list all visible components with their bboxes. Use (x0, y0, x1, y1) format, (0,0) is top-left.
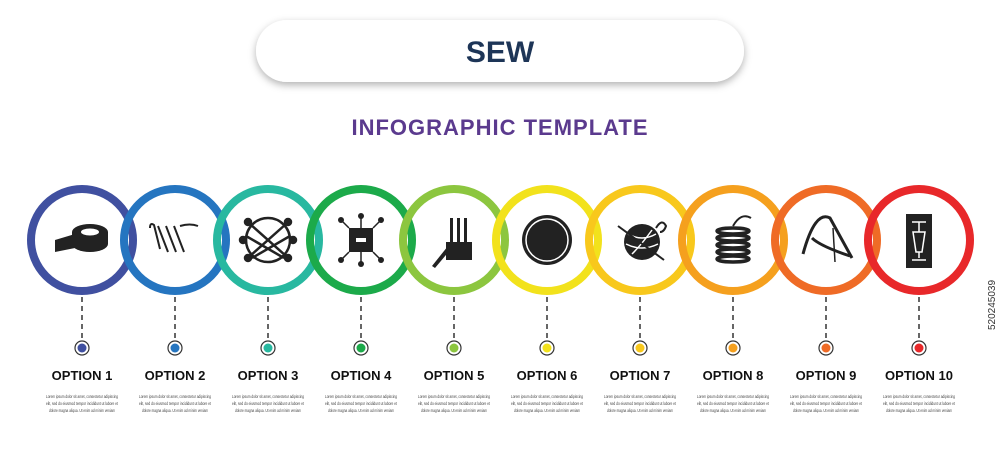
description texts: elit, sed do eiusmod tempor incididunt ut labore et (604, 401, 677, 406)
description texts: Lorem ipsum dolor sit amet, consectetur adipiscing (232, 394, 305, 399)
description texts: dolore magna aliqua. Ut enim ad minim veniam (421, 408, 487, 413)
icon: pin cushion (240, 218, 296, 262)
description texts: elit, sed do eiusmod tempor incididunt ut labore et (790, 401, 863, 406)
description texts: Lorem ipsum dolor sit amet, consectetur adipiscing (511, 394, 584, 399)
option labels: OPTION 2 (145, 368, 205, 383)
title pill: SEW (466, 36, 535, 69)
description texts: elit, sed do eiusmod tempor incididunt ut labore et (697, 401, 770, 406)
option labels: OPTION 1 (52, 368, 112, 383)
option labels: OPTION 9 (796, 368, 856, 383)
description texts: Lorem ipsum dolor sit amet, consectetur adipiscing (46, 394, 119, 399)
description texts: dolore magna aliqua. Ut enim ad minim veniam (49, 408, 115, 413)
subtitle: INFOGRAPHIC TEMPLATE (351, 115, 649, 140)
description texts: elit, sed do eiusmod tempor incididunt ut labore et (325, 401, 398, 406)
description texts (46, 394, 956, 413)
description texts: Lorem ipsum dolor sit amet, consectetur adipiscing (790, 394, 863, 399)
description texts: elit, sed do eiusmod tempor incididunt ut labore et (418, 401, 491, 406)
dots (75, 341, 926, 355)
icon: button circle (522, 215, 572, 265)
description texts: Lorem ipsum dolor sit amet, consectetur adipiscing (883, 394, 956, 399)
description texts: elit, sed do eiusmod tempor incididunt ut labore et (511, 401, 584, 406)
description texts: dolore magna aliqua. Ut enim ad minim veniam (142, 408, 208, 413)
description texts: Lorem ipsum dolor sit amet, consectetur adipiscing (697, 394, 770, 399)
option labels: OPTION 8 (703, 368, 763, 383)
option labels (52, 368, 953, 383)
icon: threader (803, 217, 852, 262)
description texts: Lorem ipsum dolor sit amet, consectetur adipiscing (604, 394, 677, 399)
description texts: elit, sed do eiusmod tempor incididunt ut labore et (46, 401, 119, 406)
icon: spring thread (717, 216, 751, 262)
description texts: elit, sed do eiusmod tempor incididunt ut labore et (139, 401, 212, 406)
description texts: Lorem ipsum dolor sit amet, consectetur adipiscing (325, 394, 398, 399)
option labels: OPTION 6 (517, 368, 577, 383)
connectors (82, 297, 919, 338)
icon: needle case (432, 218, 472, 268)
description texts: Lorem ipsum dolor sit amet, consectetur adipiscing (418, 394, 491, 399)
title pill (256, 20, 744, 82)
description texts: elit, sed do eiusmod tempor incididunt ut labore et (232, 401, 305, 406)
description texts: dolore magna aliqua. Ut enim ad minim veniam (700, 408, 766, 413)
icon: seam ripper card (906, 214, 932, 268)
circles ring (31, 189, 970, 291)
description texts: dolore magna aliqua. Ut enim ad minim veniam (886, 408, 952, 413)
description texts: dolore magna aliqua. Ut enim ad minim veniam (514, 408, 580, 413)
icon: button network (338, 213, 384, 267)
description texts: dolore magna aliqua. Ut enim ad minim veniam (235, 408, 301, 413)
option labels: OPTION 5 (424, 368, 484, 383)
option labels: OPTION 4 (331, 368, 392, 383)
description texts: Lorem ipsum dolor sit amet, consectetur adipiscing (139, 394, 212, 399)
description texts: dolore magna aliqua. Ut enim ad minim veniam (328, 408, 394, 413)
description texts: dolore magna aliqua. Ut enim ad minim veniam (607, 408, 673, 413)
option labels: OPTION 10 (885, 368, 953, 383)
icon: yarn ball (618, 222, 666, 260)
description texts: dolore magna aliqua. Ut enim ad minim veniam (793, 408, 859, 413)
option labels: OPTION 3 (238, 368, 298, 383)
option labels: OPTION 7 (610, 368, 670, 383)
side stock id: 520245039 (987, 280, 998, 330)
description texts: elit, sed do eiusmod tempor incididunt ut labore et (883, 401, 956, 406)
icon: tape measure (55, 224, 108, 252)
icon: pins (150, 224, 198, 252)
